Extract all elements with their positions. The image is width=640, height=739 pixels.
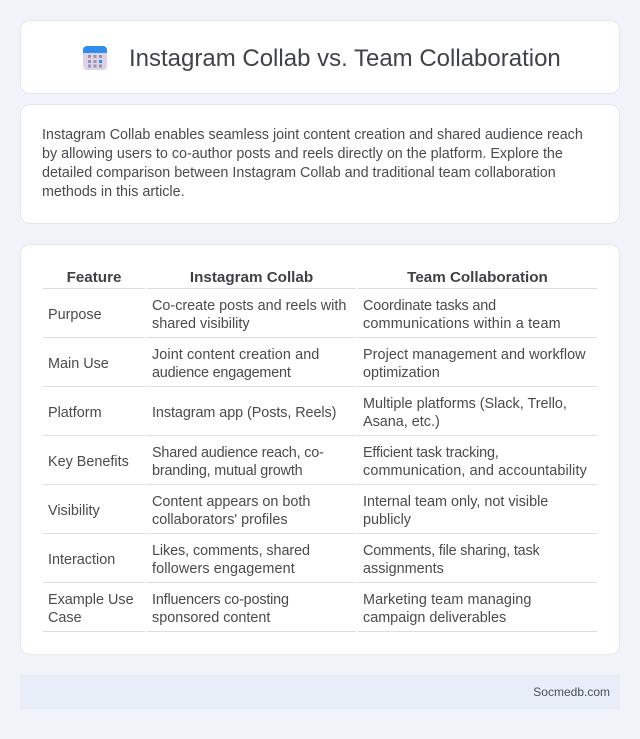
row: Purpose: Purpose [48,307,102,323]
row: Interaction: Likes, comments, shared [152,543,310,559]
row: Example Use Case [43,592,597,632]
row: Example Use Case: Marketing team managing [363,592,531,608]
row: Visibility [43,494,597,534]
footer text: Socmedb.com [533,685,610,699]
footer bar [20,675,620,709]
row: Purpose: shared visibility [152,316,250,332]
row: Interaction: assignments [363,561,444,577]
row: Example Use Case: Influencers co-posting [152,592,289,608]
row: Interaction: Interaction [48,552,115,568]
row: Key Benefits: Efficient task tracking, [363,445,499,461]
intro text: Instagram Collab enables seamless joint content creation and shared audience reach [42,127,583,143]
intro text: by allowing users to co-author posts and reels directly on the platform. Explore the [42,146,563,162]
intro text: methods in this article. [42,184,185,200]
row: Visibility: collaborators' profiles [152,512,288,528]
row: Main Use: optimization [363,365,440,381]
panel: title card [20,20,620,94]
row: Platform: Instagram app (Posts, Reels) [152,405,336,421]
row: Purpose: communications within a team [363,316,561,332]
row: Purpose [43,298,597,338]
table header: Instagram Collab [190,269,313,286]
row: Platform: Platform [48,405,102,421]
row: Platform [43,396,597,436]
row: Key Benefits: Shared audience reach, co- [152,445,324,461]
row: Key Benefits: communication, and accountability [363,463,587,479]
row: Platform: Asana, etc.) [363,414,440,430]
table header: Team Collaboration [407,269,548,286]
row: Visibility: Visibility [48,503,100,519]
row: Interaction: followers engagement [152,561,295,577]
row: Key Benefits: branding, mutual growth [152,463,302,479]
row: Interaction [43,543,597,583]
table header [43,269,597,289]
row: Main Use: Project management and workflow [363,347,586,363]
row: Key Benefits [43,445,597,485]
row: Example Use Case: campaign deliverables [363,610,506,626]
intro text: detailed comparison between Instagram Collab and traditional team collaboration [42,165,556,181]
row: Platform: Multiple platforms (Slack, Trello, [363,396,567,412]
row: Interaction: Comments, file sharing, task [363,543,540,559]
row: Visibility: publicly [363,512,411,528]
row: Main Use [43,347,597,387]
title: Instagram Collab vs. Team Collaboration [129,45,561,72]
row: Purpose: Co-create posts and reels with [152,298,346,314]
row: Example Use Case: sponsored content [152,610,270,626]
row: Visibility: Internal team only, not visible [363,494,548,510]
table header: Feature [67,269,121,286]
intro text [42,127,583,200]
row: Key Benefits: Key Benefits [48,454,129,470]
row: Purpose: Coordinate tasks and [363,298,496,314]
panel: comparison table [20,244,620,655]
row: Main Use: Main Use [48,356,109,372]
icon: calendar [83,46,107,70]
row: Main Use: audience engagement [152,365,291,381]
row: Main Use: Joint content creation and [152,347,319,363]
row: Example Use Case: Example Use [48,592,134,608]
row: Visibility: Content appears on both [152,494,310,510]
row: Example Use Case: Case [48,610,82,626]
panel: intro [20,104,620,224]
